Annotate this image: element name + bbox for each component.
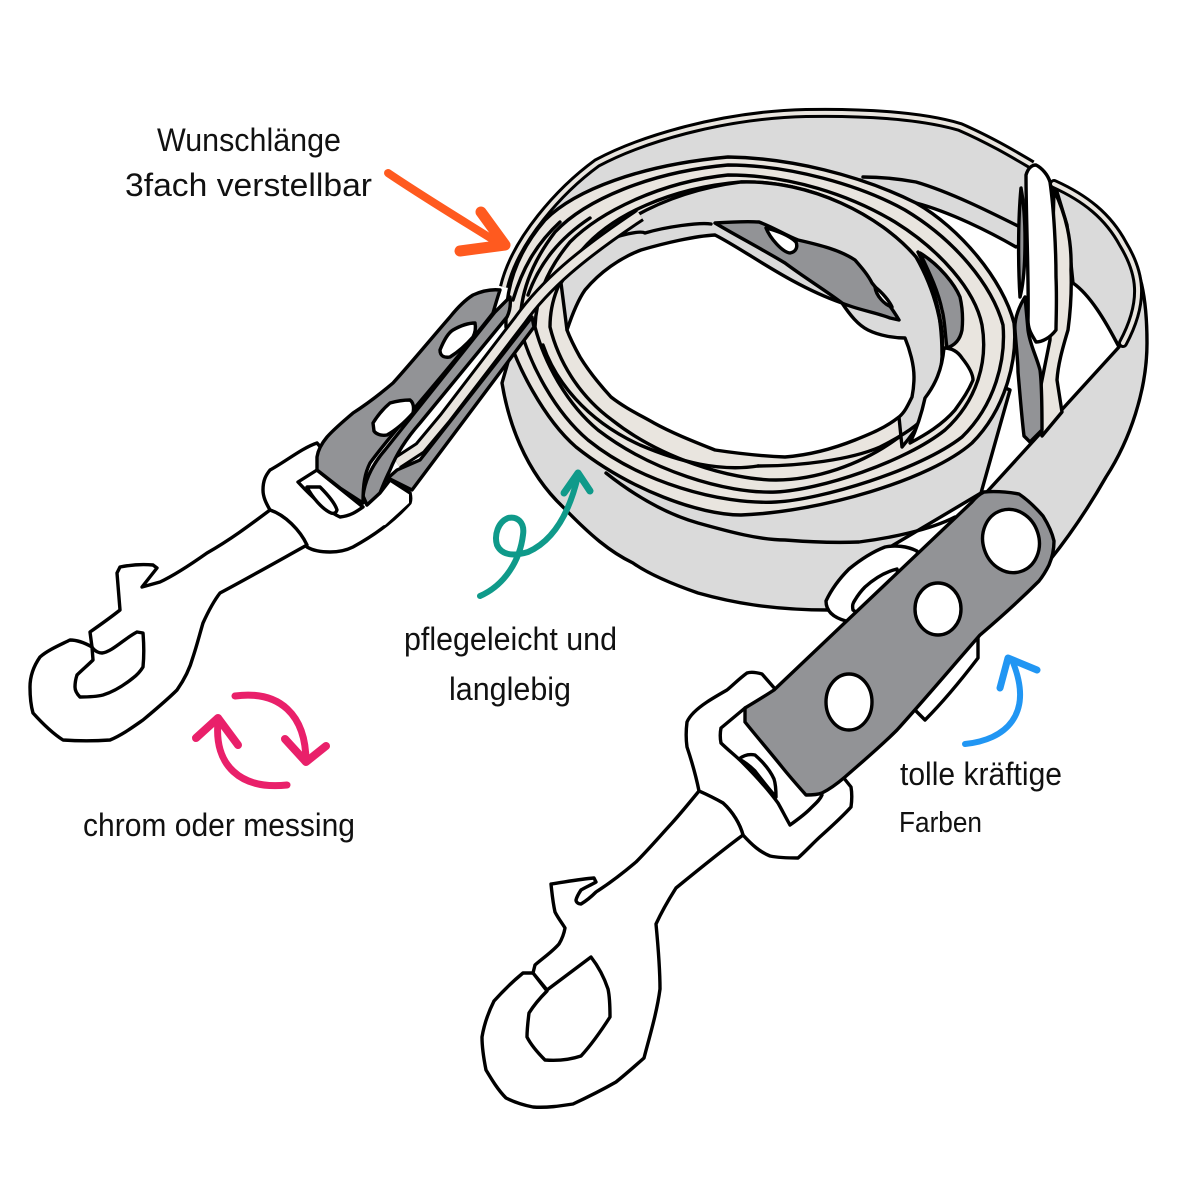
label: Wunschlänge: Wunschlänge [157, 122, 341, 158]
left strap lower dark layer [388, 317, 534, 490]
clip: right snap hook body [482, 791, 743, 1107]
right dark tab [745, 492, 1054, 795]
connector: white buckle loop [1026, 165, 1056, 342]
label: pflegeleicht und: pflegeleicht und [404, 621, 617, 657]
coil lower strap detail [758, 405, 935, 466]
arrow: orange [388, 173, 505, 251]
left dark tab [317, 290, 500, 503]
inner coil ring line over grey [918, 252, 942, 355]
coil lower-left extra strap line [543, 345, 758, 468]
coil centre hole [567, 235, 914, 457]
left strap beige crossing the coil [397, 215, 640, 463]
clip: left snap hook body [30, 510, 307, 741]
right tab hole 2 [915, 583, 961, 635]
clip: right loop inner piece [853, 569, 900, 615]
panel: coil of beige strap [506, 157, 1015, 515]
panel: bottom band of the leash [502, 300, 1010, 610]
clip: left swivel loop [263, 443, 411, 552]
white gap under top band [863, 177, 1020, 227]
label: chrom oder messing: chrom oder messing [83, 807, 355, 843]
illustration: coiled dog leash [30, 113, 1147, 1107]
inner band line [598, 224, 711, 243]
clip: left hook opening [75, 632, 144, 697]
label: tolle kräftige: tolle kräftige [900, 756, 1062, 792]
left swivel tail over the strap [352, 480, 410, 530]
arrow: teal [480, 473, 590, 596]
white hole in inner tab [766, 228, 797, 253]
arrow: blue [965, 658, 1037, 744]
connector: beige strap at right [1040, 190, 1071, 436]
coil strap line 2 [520, 165, 1003, 502]
coil upper-left strap details [513, 218, 590, 300]
clip: right swivel oval [739, 755, 776, 797]
white gap right of hole [910, 348, 973, 443]
clip: right hook opening [527, 957, 610, 1060]
dark tab inside coil [715, 222, 899, 320]
left tab lower hole [373, 400, 414, 435]
label: Farben: Farben [899, 807, 982, 839]
dark tab right of hole [920, 253, 963, 348]
connector: dark lower tab [1015, 297, 1042, 442]
clip: right swivel loop [686, 672, 852, 858]
coil interior beige fill [550, 182, 943, 480]
panel: top band of the leash [515, 113, 1032, 283]
clip: right loop behind tab [826, 546, 930, 625]
label: 3fach verstellbar: 3fach verstellbar [125, 167, 372, 203]
band upper edge below coil [606, 473, 955, 542]
arrow: pink rotate arrows [196, 695, 326, 786]
coil strap line 3 [535, 175, 984, 492]
strap rim on right loop [1054, 184, 1138, 343]
right tab hole 1 [974, 502, 1048, 580]
label: langlebig: langlebig [449, 671, 571, 707]
small hole in inner tab [875, 287, 892, 307]
connector: dark upper sliver [1019, 188, 1025, 297]
clip: left swivel oval [307, 487, 337, 513]
left tab upper hole [440, 323, 475, 357]
left tab folded layer [363, 297, 510, 505]
clip: left swivel window [298, 470, 363, 517]
panel: right loop of the leash [975, 182, 1147, 560]
coil interior grey band [561, 182, 943, 447]
right tab hole 3 [826, 674, 872, 730]
top strap rim [504, 113, 1032, 287]
clip: right loop under tab [915, 630, 978, 720]
clip: right swivel window [720, 708, 822, 825]
